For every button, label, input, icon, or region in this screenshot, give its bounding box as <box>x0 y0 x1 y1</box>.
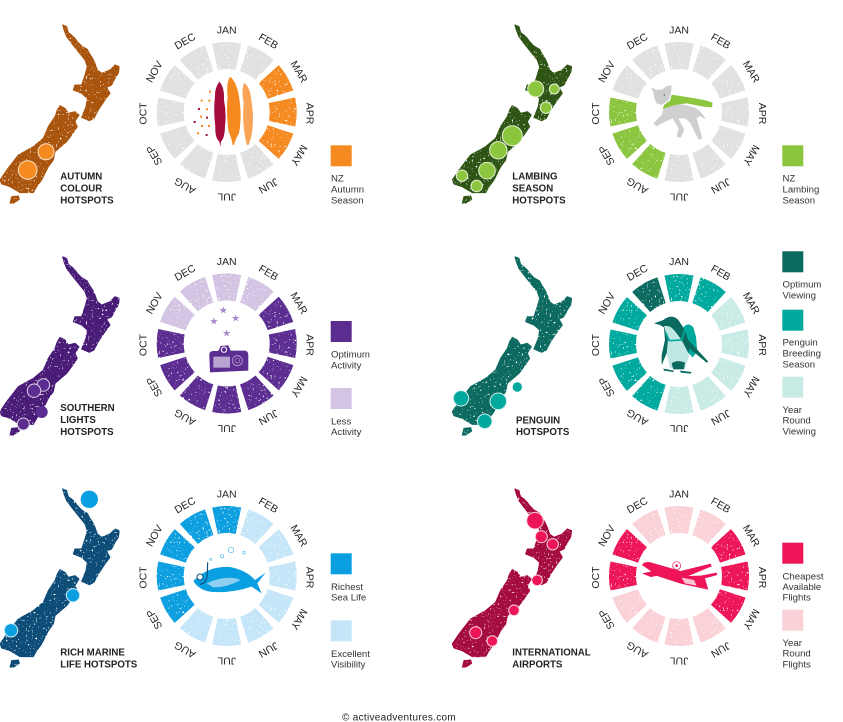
month labels: southern lights: APR <box>304 334 316 356</box>
month labels: airports: JAN <box>669 488 689 500</box>
legend: marine <box>331 553 370 671</box>
legend: penguin: Round <box>782 416 811 427</box>
title: penguin: HOTSPOTS <box>516 427 570 438</box>
month labels: autumn: JAN <box>217 24 237 36</box>
legend: penguin: Viewing <box>782 426 816 437</box>
month labels: southern lights: JUN <box>256 407 280 427</box>
month labels: penguin: APR <box>756 334 768 356</box>
hotspots: marine <box>4 491 98 637</box>
month labels: airports: MAY <box>740 606 762 632</box>
month labels: lambing <box>590 24 768 202</box>
month labels: southern lights: MAY <box>288 374 309 399</box>
month labels: southern lights: MAR <box>288 290 310 317</box>
month labels: lambing: FEB <box>709 31 732 52</box>
ring: marine months <box>157 506 297 646</box>
month labels: airports: MAR <box>740 523 762 549</box>
ring: penguin months <box>609 274 749 414</box>
month labels: lambing: JUL <box>670 190 688 202</box>
title: marine: RICH MARINE <box>60 647 125 658</box>
icon: camera and stars <box>209 306 248 372</box>
legend: airports <box>782 543 824 671</box>
title: autumn: COLOUR <box>60 184 102 194</box>
month labels: airports: SEP <box>597 607 618 631</box>
legend: autumn: NZ <box>331 174 344 185</box>
panel: penguin <box>452 251 821 438</box>
month labels: penguin: JAN <box>669 256 689 268</box>
month labels: penguin: OCT <box>590 333 602 356</box>
legend: marine: Sea Life <box>331 593 366 604</box>
month labels: lambing: JAN <box>669 24 689 36</box>
legend: penguin: Optimum <box>782 280 821 291</box>
month labels: marine: AUG <box>172 638 198 660</box>
month labels: autumn: OCT <box>138 102 150 125</box>
month labels: autumn: JUL <box>217 190 236 202</box>
title: airports: INTERNATIONAL <box>512 647 591 658</box>
legend: lambing: Season <box>782 195 815 206</box>
legend: airports: Flights <box>782 660 811 671</box>
legend: autumn: Autumn <box>331 185 364 196</box>
month labels: southern lights: OCT <box>138 333 150 356</box>
legend: southern lights: Less <box>331 416 351 427</box>
month labels: marine: MAY <box>288 606 309 632</box>
month labels: marine: OCT <box>138 566 150 589</box>
icon: penguin with backpack <box>654 317 708 374</box>
title: southern lights: HOTSPOTS <box>60 427 114 438</box>
month labels: penguin: SEP <box>597 374 618 399</box>
icon: autumn trees <box>194 77 253 147</box>
panel: international airports <box>452 488 824 671</box>
month labels: airports: NOV <box>596 523 618 549</box>
month labels: marine: FEB <box>256 495 280 516</box>
month labels: autumn: MAR <box>288 59 310 85</box>
title: southern lights: LIGHTS <box>60 415 96 426</box>
title: autumn: HOTSPOTS <box>60 195 114 206</box>
month labels: airports: AUG <box>625 638 650 660</box>
legend: southern lights: Optimum <box>331 349 370 360</box>
month labels: penguin: JUN <box>709 407 732 427</box>
month labels: airports: FEB <box>709 495 732 516</box>
legend: penguin <box>782 251 821 437</box>
month labels: autumn <box>138 24 316 202</box>
ring: autumn months <box>157 42 297 182</box>
month labels: lambing: NOV <box>596 59 618 85</box>
month labels: penguin <box>590 256 768 434</box>
month labels: lambing: SEP <box>597 143 618 167</box>
month labels: penguin: MAR <box>740 290 762 317</box>
month labels: marine: APR <box>304 567 316 589</box>
legend: penguin: Penguin <box>782 338 818 349</box>
month labels: lambing: MAY <box>740 142 762 168</box>
map: marine New Zealand <box>0 489 119 667</box>
month labels: marine: JUL <box>217 654 236 666</box>
legend: penguin: Season <box>782 360 815 371</box>
legend: lambing: Lambing <box>782 185 819 196</box>
icon: lamb with cape <box>651 85 713 140</box>
month labels: southern lights: JAN <box>217 256 237 268</box>
month labels: autumn: MAY <box>288 142 309 168</box>
legend: autumn <box>331 145 364 206</box>
title: autumn: AUTUMN <box>60 172 102 182</box>
month labels: autumn: AUG <box>172 174 198 196</box>
month labels: southern lights: JUL <box>217 422 236 434</box>
hotspots: penguin <box>453 382 522 429</box>
legend: airports: Year <box>782 638 803 649</box>
month labels: marine <box>138 488 316 666</box>
month labels: penguin: DEC <box>625 262 650 284</box>
month labels: penguin: MAY <box>740 374 762 399</box>
month labels: penguin: FEB <box>709 263 732 283</box>
legend: marine: Richest <box>331 582 363 593</box>
hotspots: airports <box>470 512 558 646</box>
month labels: lambing: DEC <box>625 31 650 52</box>
month labels: autumn: NOV <box>144 59 166 85</box>
month labels: southern lights: DEC <box>173 262 198 284</box>
legend: airports: Round <box>782 649 811 660</box>
map: autumn New Zealand <box>0 25 119 203</box>
title: airports: AIRPORTS <box>512 659 563 670</box>
title: marine: LIFE HOTSPOTS <box>60 659 138 670</box>
hotspots: southern lights <box>17 379 50 430</box>
month labels: autumn: SEP <box>144 143 165 167</box>
legend: airports: Flights <box>782 593 811 604</box>
ring: airports months <box>609 506 749 646</box>
month labels: autumn: JUN <box>256 175 280 196</box>
month labels: autumn: APR <box>304 103 316 125</box>
month labels: lambing: APR <box>756 103 768 125</box>
legend: marine: Visibility <box>331 660 366 671</box>
hotspots: lambing <box>456 81 559 192</box>
legend: southern lights <box>331 321 370 438</box>
legend: lambing <box>782 145 819 206</box>
month labels: lambing: AUG <box>625 174 650 196</box>
legend: autumn: Season <box>331 195 364 206</box>
month labels: penguin: JUL <box>670 422 688 434</box>
legend: southern lights: Activity <box>331 360 362 371</box>
title: lambing: SEASON <box>512 184 553 194</box>
month labels: lambing: OCT <box>590 102 602 125</box>
legend: airports: Available <box>782 582 821 593</box>
month labels: airports: OCT <box>590 566 602 589</box>
month labels: southern lights: NOV <box>144 291 166 316</box>
month labels: airports: APR <box>756 567 768 589</box>
legend: airports: Cheapest <box>782 571 824 582</box>
title: lambing: HOTSPOTS <box>512 195 566 206</box>
month labels: lambing: MAR <box>740 59 762 85</box>
map: penguin New Zealand <box>452 257 572 435</box>
month labels: penguin: NOV <box>596 291 618 316</box>
month labels: southern lights <box>138 256 316 434</box>
month labels: marine: DEC <box>173 495 198 516</box>
month labels: autumn: DEC <box>173 31 198 52</box>
month labels: airports <box>590 488 768 666</box>
month labels: penguin: AUG <box>625 406 650 428</box>
legend: penguin: Breeding <box>782 349 821 360</box>
map: lambing New Zealand <box>452 25 572 203</box>
month labels: southern lights: SEP <box>144 374 165 399</box>
month labels: southern lights: FEB <box>256 263 280 283</box>
month labels: airports: JUN <box>709 639 732 660</box>
month labels: autumn: FEB <box>256 31 280 52</box>
legend: penguin: Year <box>782 405 803 416</box>
month labels: marine: JAN <box>217 488 237 500</box>
panel: southern lights <box>0 256 370 438</box>
icon: fish with snorkel <box>193 547 266 593</box>
title: penguin: PENGUIN <box>516 415 560 426</box>
month labels: marine: MAR <box>288 523 310 549</box>
month labels: lambing: JUN <box>709 175 732 196</box>
month labels: marine: JUN <box>256 639 280 660</box>
hotspots: autumn <box>18 144 54 179</box>
title: southern lights: SOUTHERN <box>60 403 115 414</box>
legend: southern lights: Activity <box>331 427 362 438</box>
map: southern lights New Zealand <box>0 257 119 435</box>
month labels: marine: SEP <box>144 607 165 631</box>
title: lambing: LAMBING <box>512 172 558 182</box>
icon: plane <box>642 562 717 590</box>
legend: lambing: NZ <box>782 174 795 185</box>
month labels: southern lights: AUG <box>172 406 198 428</box>
month labels: airports: DEC <box>625 495 650 516</box>
panel: autumn colour <box>0 24 364 206</box>
ring: southern lights months <box>157 274 297 413</box>
map: airports New Zealand <box>452 489 572 667</box>
month labels: marine: NOV <box>144 523 166 549</box>
legend: penguin: Viewing <box>782 290 816 301</box>
ring: lambing months <box>609 42 749 182</box>
month labels: airports: JUL <box>670 654 688 666</box>
legend: marine: Excellent <box>331 649 370 660</box>
panel: rich marine life <box>0 488 370 671</box>
panel: lambing season <box>452 24 819 206</box>
